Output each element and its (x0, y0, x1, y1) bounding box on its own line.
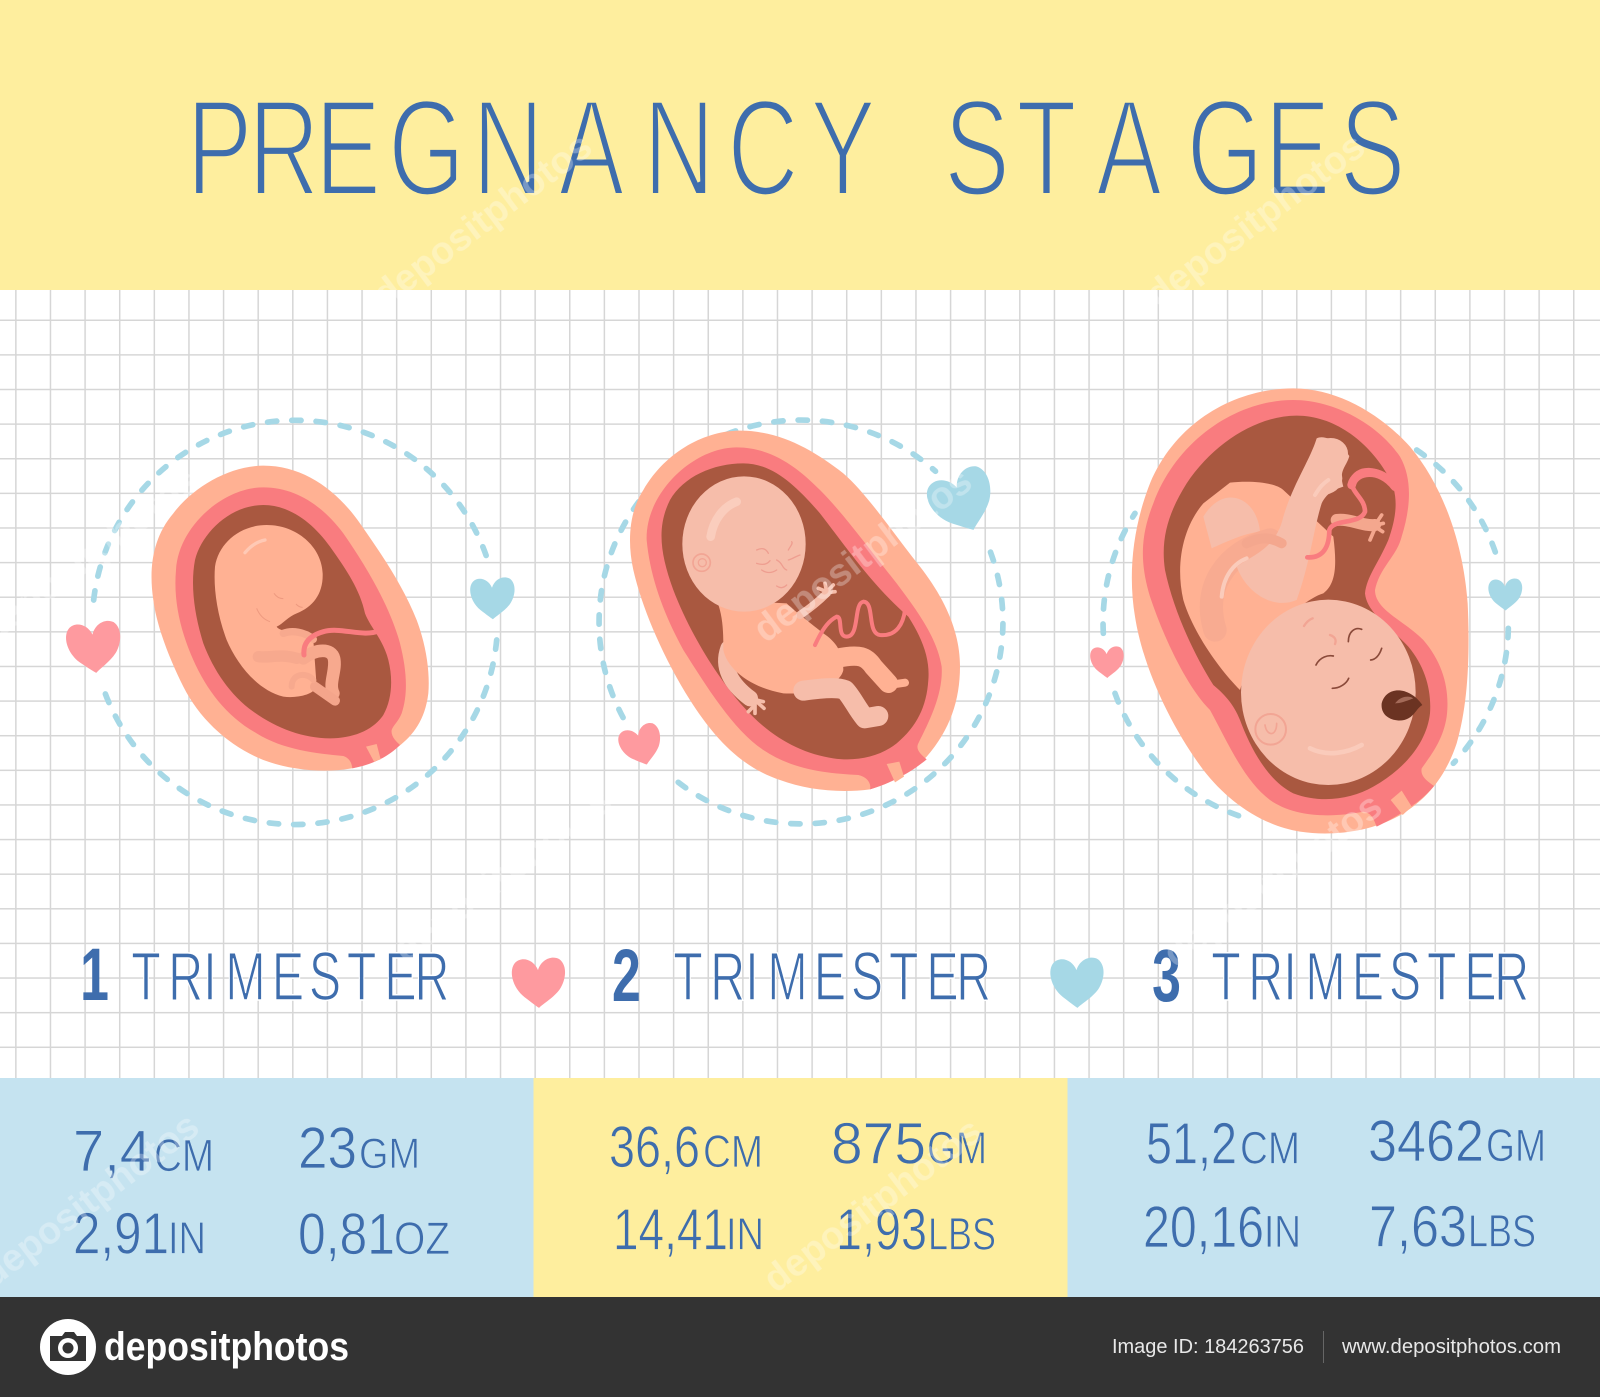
panel: trimester 2 measurements: 14,41 (613, 1198, 728, 1262)
panel: trimester 2 measurements (534, 1078, 1068, 1297)
panel: trimester 2 measurements: IN (726, 1208, 764, 1260)
watermarks (0, 125, 1390, 1301)
cervix (887, 762, 904, 782)
panel: trimester 1 measurements (0, 1078, 534, 1297)
panel: trimester 3 measurements: 51,2 (1146, 1112, 1237, 1176)
panel: trimester 1 measurements: CM (154, 1130, 214, 1181)
icon: pink heart (1090, 646, 1124, 678)
panel: trimester 3 measurements: 7,63 (1369, 1194, 1467, 1260)
icon: pink heart (65, 620, 123, 675)
panel: trimester 1 measurements: GM (359, 1130, 420, 1178)
panel: trimester 2 measurements: 36,6 (609, 1115, 700, 1180)
image id: Image ID: 184263756 (1112, 1336, 1304, 1358)
icon: pink heart (616, 721, 667, 770)
panel: trimester 3 measurements: GM (1486, 1120, 1546, 1171)
umbilical cord (304, 630, 378, 655)
uterus wall (175, 487, 406, 768)
umbilical cord (1307, 470, 1395, 557)
watermarks: depositphotos (1156, 785, 1390, 976)
icon: blue heart (1488, 579, 1522, 610)
watermarks: depositphotos (746, 460, 980, 651)
stage 1 illustration (65, 420, 515, 825)
watermarks: depositphotos (386, 780, 620, 971)
icon: blue heart (922, 462, 1003, 541)
trimester label 2: 2 (612, 934, 641, 1017)
panel: trimester 3 measurements: LBS (1468, 1206, 1536, 1256)
watermarks: depositphotos (366, 125, 600, 316)
panel: trimester 2 measurements: GM (927, 1122, 987, 1174)
amniotic cavity (1164, 416, 1430, 799)
panel: trimester 3 measurements (1068, 1078, 1600, 1297)
watermarks: depositphotos (1139, 125, 1373, 316)
logo: wordmark: depositphotos (104, 1325, 349, 1369)
footer bar (0, 1297, 1600, 1397)
dashed ring: stage 1 (94, 420, 497, 825)
header band (0, 0, 1600, 290)
cervix (1391, 791, 1412, 815)
trimester label 1: TRIMESTER (131, 937, 449, 1015)
panel: trimester 3 measurements: 20,16 (1143, 1195, 1264, 1260)
divider (1323, 1331, 1324, 1363)
panel: trimester 1 measurements: 7,4 (73, 1119, 151, 1184)
hair tuft (1382, 690, 1422, 720)
cervix (366, 744, 381, 762)
amniotic cavity (193, 505, 391, 738)
face details (1255, 618, 1382, 753)
head (682, 476, 806, 612)
uterus outer layer (630, 431, 960, 791)
panel: trimester 1 measurements: 2,91 (73, 1202, 169, 1266)
logo: camera badge (40, 1319, 96, 1375)
icon: blue heart divider (1050, 958, 1104, 1008)
trimester label 1: 1 (80, 933, 109, 1016)
fetus: second trimester (682, 476, 905, 718)
panel: trimester 2 measurements: CM (703, 1126, 763, 1177)
stage 2 illustration (599, 420, 1003, 824)
watermarks: depositphotos (756, 1110, 990, 1301)
panel: trimester 1 measurements: OZ (394, 1213, 450, 1264)
amniotic cavity (662, 463, 929, 759)
uterus outer layer (152, 466, 429, 771)
uterus outer layer (1132, 388, 1469, 833)
dashed ring: stage 2 (599, 420, 1003, 824)
icon: pink heart divider (512, 958, 565, 1008)
fetus: first trimester (215, 525, 335, 701)
dashed ring: stage 3 (1103, 450, 1508, 818)
panel: trimester 2 measurements: LBS (928, 1208, 996, 1260)
stage 3 illustration (1090, 388, 1522, 833)
title: PREGNANCY STAGES (187, 72, 1405, 225)
panel: trimester 3 measurements: IN (1264, 1206, 1301, 1257)
panel: trimester 3 measurements: CM (1240, 1122, 1300, 1174)
panel: trimester 1 measurements: 0,81 (298, 1202, 395, 1267)
panel: trimester 1 measurements: 23 (298, 1116, 357, 1181)
panel: trimester 3 measurements: 3462 (1368, 1109, 1484, 1174)
panel: trimester 1 measurements: IN (168, 1212, 206, 1264)
umbilical cord (815, 602, 905, 645)
icon: blue heart (470, 577, 515, 619)
trimester label 3: 3 (1152, 934, 1181, 1017)
website: www.depositphotos.com (1341, 1336, 1561, 1358)
fetus: third trimester (1180, 437, 1422, 785)
trimester label 2: TRIMESTER (673, 937, 991, 1015)
uterus wall (1143, 400, 1447, 827)
panel: trimester 2 measurements: 875 (831, 1112, 926, 1176)
head (1241, 600, 1416, 785)
trimester label 3: TRIMESTER (1211, 937, 1529, 1015)
uterus wall (647, 447, 942, 789)
panel: trimester 2 measurements: 1,93 (836, 1198, 927, 1262)
